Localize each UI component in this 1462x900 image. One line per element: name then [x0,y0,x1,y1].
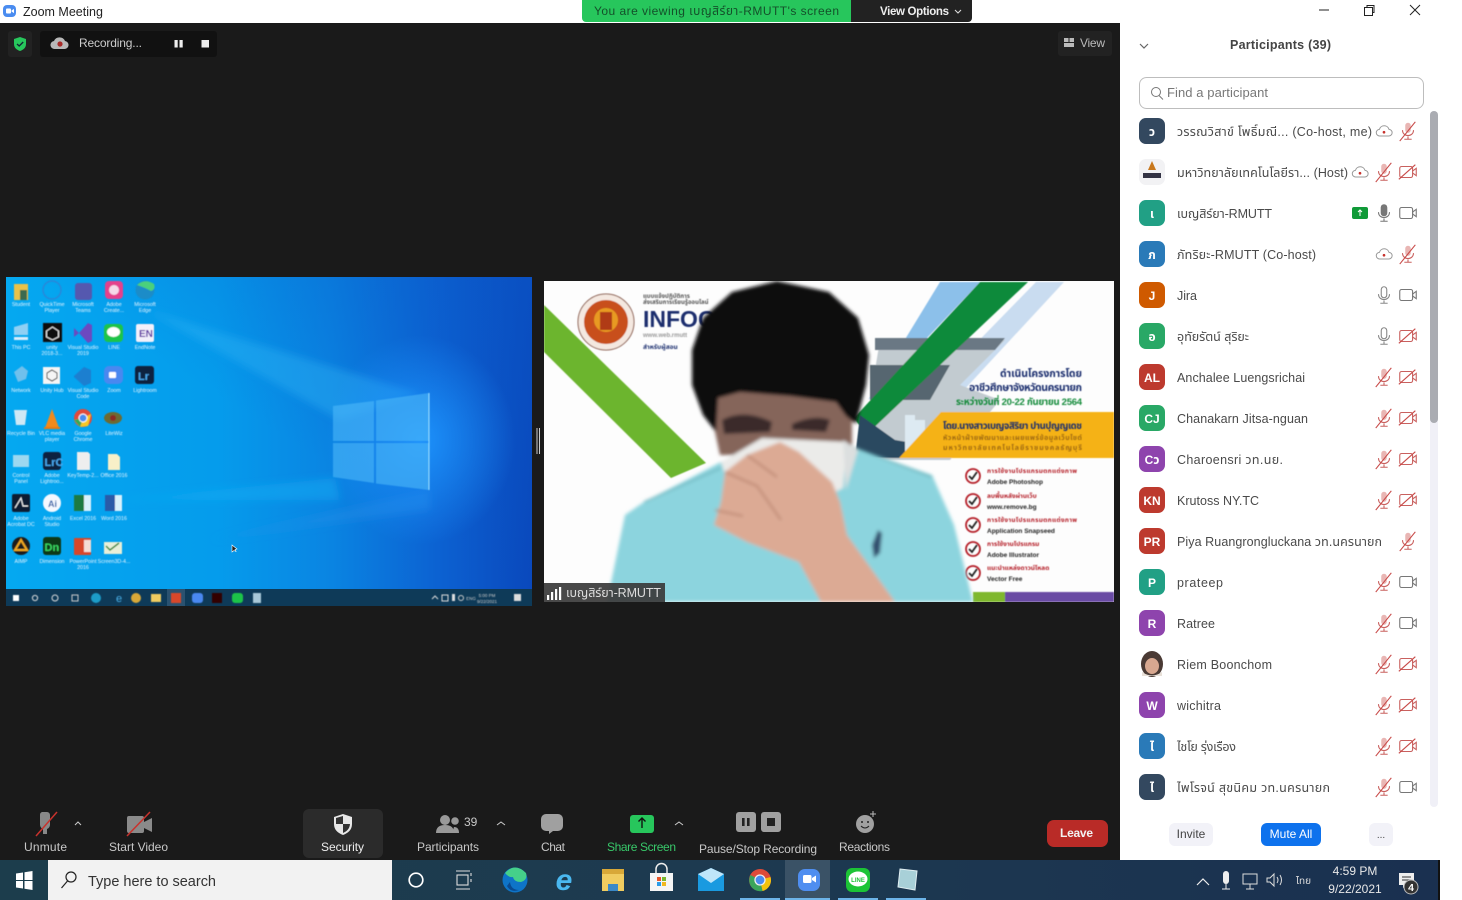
icon labels: Chrome [74,437,92,443]
participant row 15: wichitra [1176,699,1221,713]
invite button [1169,823,1213,846]
system tray: 9/22/2021 [1328,882,1382,896]
poster text: ส่งเสริมการเรียนรู้ออนไลน์ [643,298,709,306]
participant row 11: Piya Ruangrongluckana วท.นครนายก [1177,535,1382,549]
icon: mail [698,868,724,891]
desktop icons [12,280,155,555]
more button [1369,823,1393,846]
participant row 4: ภัทริยะ-RMUTT (Co-host) [1177,248,1316,262]
poster text: ระหว่างวันที่ 20-22 กันยายน 2564 [956,395,1083,408]
icon labels: Recycle Bin [7,431,35,437]
unmute button [24,812,81,854]
running indicators [740,898,926,900]
icon labels: Word 2016 [101,516,127,522]
pause/stop recording button [699,812,817,856]
desktop icons: Lr [138,371,150,383]
participant row 6: อ [1148,330,1156,344]
participant row 7 [1139,364,1416,390]
icon labels: Edge [139,308,151,314]
icon labels: Dimension [39,559,65,565]
participant row 11 [1139,528,1415,554]
poster text: มหาวิทยาลัยเทคโนโลยีราชมงคลธัญบุรี [943,444,1082,453]
recording status [40,31,217,57]
participant row 10 [1139,487,1416,513]
icon: stop [202,40,209,48]
view button [1058,31,1112,56]
icon labels: LINE [108,345,120,351]
icon labels: 2019 [77,351,89,357]
icon labels: Adobe [106,302,122,308]
window controls [1319,5,1420,16]
checklist icons [966,469,980,580]
icon: line: LINE [851,878,865,884]
desktop taskbar: 5:00 PM [479,593,496,598]
windows logo [333,393,429,490]
desktop icons: Ai [48,499,57,509]
icon: zoom logo [3,5,16,17]
panel: bottom toolbar [24,809,1108,858]
system tray: ไทย [1295,875,1311,887]
reactions button [839,811,890,854]
participant row 8 [1139,405,1416,431]
participants heading: Participants (39) [1230,38,1331,52]
icon labels: Acrobat DC [7,522,35,528]
participant row 13: Ratree [1177,617,1215,631]
poster text: โดย.นางสาวเบญจสิริยา ปานปุญญเดช [943,421,1082,432]
chat button [541,814,566,854]
participant row 1: วรรณวิสาข์ โพธิ์มณี... (Co-host, me) [1177,124,1372,139]
icon labels: LiteWiz [105,431,123,437]
participant row 16 [1139,733,1416,759]
title bar [3,5,103,19]
participant row 8: Chanakarn Jitsa-nguan [1177,412,1308,426]
icon: store [650,864,673,891]
icon labels: Create... [104,308,124,314]
participant row 5 [1139,282,1416,308]
icon labels: Code [77,394,89,400]
scrollbar [1430,111,1438,807]
icon labels: Adobe [13,516,29,522]
poster text: INFOG [643,306,716,332]
icon labels: Excel 2016 [70,516,96,522]
desktop taskbar: 9/22/2021 [477,599,498,604]
icon labels: player [45,437,59,443]
poster text: Adobe Illustrator [987,552,1039,559]
poster text [642,293,1083,583]
participant row 15 [1139,692,1416,718]
participants button [417,815,505,854]
participant row 7: AL [1144,371,1160,385]
panel: presenter video [544,281,1114,602]
start video button: Start Video [109,840,168,854]
meeting stage [0,23,1120,860]
icon labels: Network [11,388,31,394]
participant row 9 [1139,446,1416,472]
poster text: หัวหน้าฝ่ายพัฒนาและเผยแพร่ข้อมูลเว็บไซต์ [943,434,1082,442]
view options button [851,0,972,22]
screen share banner [582,0,972,22]
participant row 12: P [1148,576,1156,590]
notifications: 4 [1408,882,1414,894]
poster text: www.remove.bg [986,504,1037,511]
participant row 11: PR [1144,535,1161,549]
poster text: แบบแจ้งปฏิบัติการ [643,293,690,300]
participant row 6 [1139,323,1416,349]
participant row 2 [1139,159,1416,185]
poster text: การใช้งานโปรแกรมตกแต่งภาพ [987,467,1077,475]
start video button [109,812,168,854]
unmute button: Unmute [24,840,67,854]
participant row 12: prateep [1177,576,1223,590]
poster text: ดำเนินโครงการโดย [1000,368,1082,380]
icon labels: Student [12,302,31,308]
icon labels: Player [44,308,60,314]
icon labels: Lightroom [133,388,157,394]
poster text: ลบพื้นหลังผ่านเว็บ [987,491,1037,500]
participant row 9: Cว [1145,453,1159,467]
more button: ... [1377,830,1385,841]
desktop taskbar [6,589,532,606]
search box [48,860,392,900]
panel: participants [1139,38,1438,846]
icon: internet explorer: e [556,864,572,897]
participant row 1: ว [1149,125,1155,139]
name tag: เบญสิร์ยา-RMUTT [566,586,661,600]
icon: notepad app [898,869,917,890]
participant row 12 [1139,569,1416,595]
participant row 3 [1139,200,1416,226]
mute all button: Mute All [1270,827,1312,841]
poster text: สำหรับผู้สอน [643,343,678,351]
icon labels: 2016 [77,565,89,571]
icon: cloud recording [50,37,69,49]
system tray [1197,864,1418,896]
icon labels: Studio [44,522,60,528]
participant row 8: CJ [1144,412,1160,426]
pause/stop recording button: Pause/Stop Recording [699,842,817,856]
icon labels: AIMP [15,559,28,565]
desktop icons: LrC [44,457,64,469]
participant row 3: เ [1150,207,1154,221]
search box: Find a participant [1167,85,1268,100]
participant row 2: มหาวิทยาลัยเทคโนโลยีรา... (Host) [1177,166,1348,180]
security button: Security [321,840,364,854]
icon: line [846,868,870,892]
icon: pause [174,40,183,48]
share screen button: Share Screen [607,840,676,854]
icon labels: Teams [75,308,91,314]
icon labels [7,302,157,571]
panel: shared desktop [6,277,532,606]
screen share banner: You are viewing เบญสิร์ยา-RMUTT's screen [594,4,839,18]
participant row 17: ไพโรจน์ สุขนิคม วท.นครนายก [1176,781,1330,795]
participant row 4: ภ [1148,248,1156,262]
participant row 10: Krutoss NY.TC [1177,494,1259,508]
poster text: การใช้งานโปรแกรม [987,540,1039,548]
participant row 4 [1139,241,1415,267]
icon labels: Visual Studio [68,345,98,351]
poster text: แนะนำแหล่งดาวน์โหลด [987,564,1049,572]
poster text: Adobe Photoshop [987,479,1043,486]
icon labels: Adobe [44,473,60,479]
icon labels: PowerPoint [69,559,97,565]
desktop icons: Dn [44,542,59,554]
participant row 5: J [1149,289,1155,303]
desktop taskbar: e [116,593,122,605]
participant row 7: Anchalee Luengsrichai [1177,371,1305,385]
mute all button [1261,823,1321,846]
system tray: 4:59 PM [1333,864,1377,878]
icon labels: EndNote [135,345,155,351]
participant row 10: KN [1143,494,1161,508]
participant row 6: อุทัยรัตน์ สุริยะ [1177,330,1249,344]
search box: Type here to search [88,874,216,890]
icon labels: QuickTime [39,302,65,308]
participants heading [1140,38,1331,52]
participants button: Participants [417,840,479,854]
invite button: Invite [1177,827,1206,841]
poster text: Application Snapseed [987,528,1055,535]
poster text: การใช้งานโปรแกรมตกแต่งภาพ [987,516,1077,524]
window title: Zoom Meeting [23,5,103,19]
participant row 3: เบญสิร์ยา-RMUTT [1177,207,1272,221]
desktop taskbar: ENG [466,596,476,601]
icon labels: VLC media [39,431,65,437]
reactions button: Reactions [839,840,890,854]
participant row 17: ไ [1150,781,1155,795]
wallpaper beams [168,318,426,523]
participants button: 39 [464,815,478,829]
mouse cursor [232,545,237,552]
security badge [8,31,32,57]
desktop icons: EN [139,329,153,340]
university logo [578,294,634,350]
presenter [607,281,973,602]
icon: explorer [602,869,624,891]
participant row 5: Jira [1177,289,1197,303]
icon labels: This PC [12,345,31,351]
splitter handle [536,428,540,454]
icon labels: Office 2016 [100,473,128,479]
participant row 14: Riem Boonchom [1177,658,1272,672]
icon labels: unity [46,345,58,351]
task view icons [409,871,471,889]
participant row 14 [1141,651,1416,677]
name tag [544,583,665,602]
icon labels: KeyTemp-2... [67,473,99,479]
icon labels: Control [12,473,30,479]
icon labels: Android [43,516,61,522]
icon: edge [502,868,528,892]
icon labels: Unity Hub [40,388,64,394]
icon labels: Lightroo... [40,479,64,485]
leave button: Leave [1060,826,1093,840]
icon labels: Panel [14,479,28,485]
participant row 16: ไชโย รุ่งเรือง [1176,740,1236,754]
icon labels: Screen3D-4... [98,559,130,565]
participant row 9: Charoensri วท.นย. [1177,453,1283,467]
icon labels: 2018-3... [42,351,62,357]
notifications [1399,873,1418,894]
view button: View [1080,36,1105,50]
icon labels: Microsoft [72,302,94,308]
icon: start [16,871,32,890]
security button [303,809,383,858]
participant row 13 [1139,610,1416,636]
icon labels: Visual Studio [68,388,98,394]
participant row 13: R [1148,617,1157,631]
participant row 15: W [1146,699,1158,713]
search box [1140,78,1424,108]
recording status: Recording... [79,36,142,50]
poster text: Vector Free [987,576,1023,583]
icon labels: Google [74,431,92,437]
leave button [1047,820,1108,847]
poster graphics [544,282,1114,602]
icon labels: Zoom [107,388,121,394]
participant row 16: ไ [1150,740,1155,754]
view options button: View Options [880,6,949,18]
participant row 17 [1139,774,1416,800]
icon labels: Microsoft [134,302,156,308]
participant row 1 [1139,118,1415,144]
active zoom task [785,860,830,900]
share screen button [607,815,683,854]
chat button: Chat [541,840,566,854]
poster text: www.web.rmutt [642,333,687,339]
poster text: อาชีวศึกษาจังหวัดนครนายก [969,382,1082,394]
icon: chrome [749,869,771,891]
windows taskbar [0,860,1440,900]
